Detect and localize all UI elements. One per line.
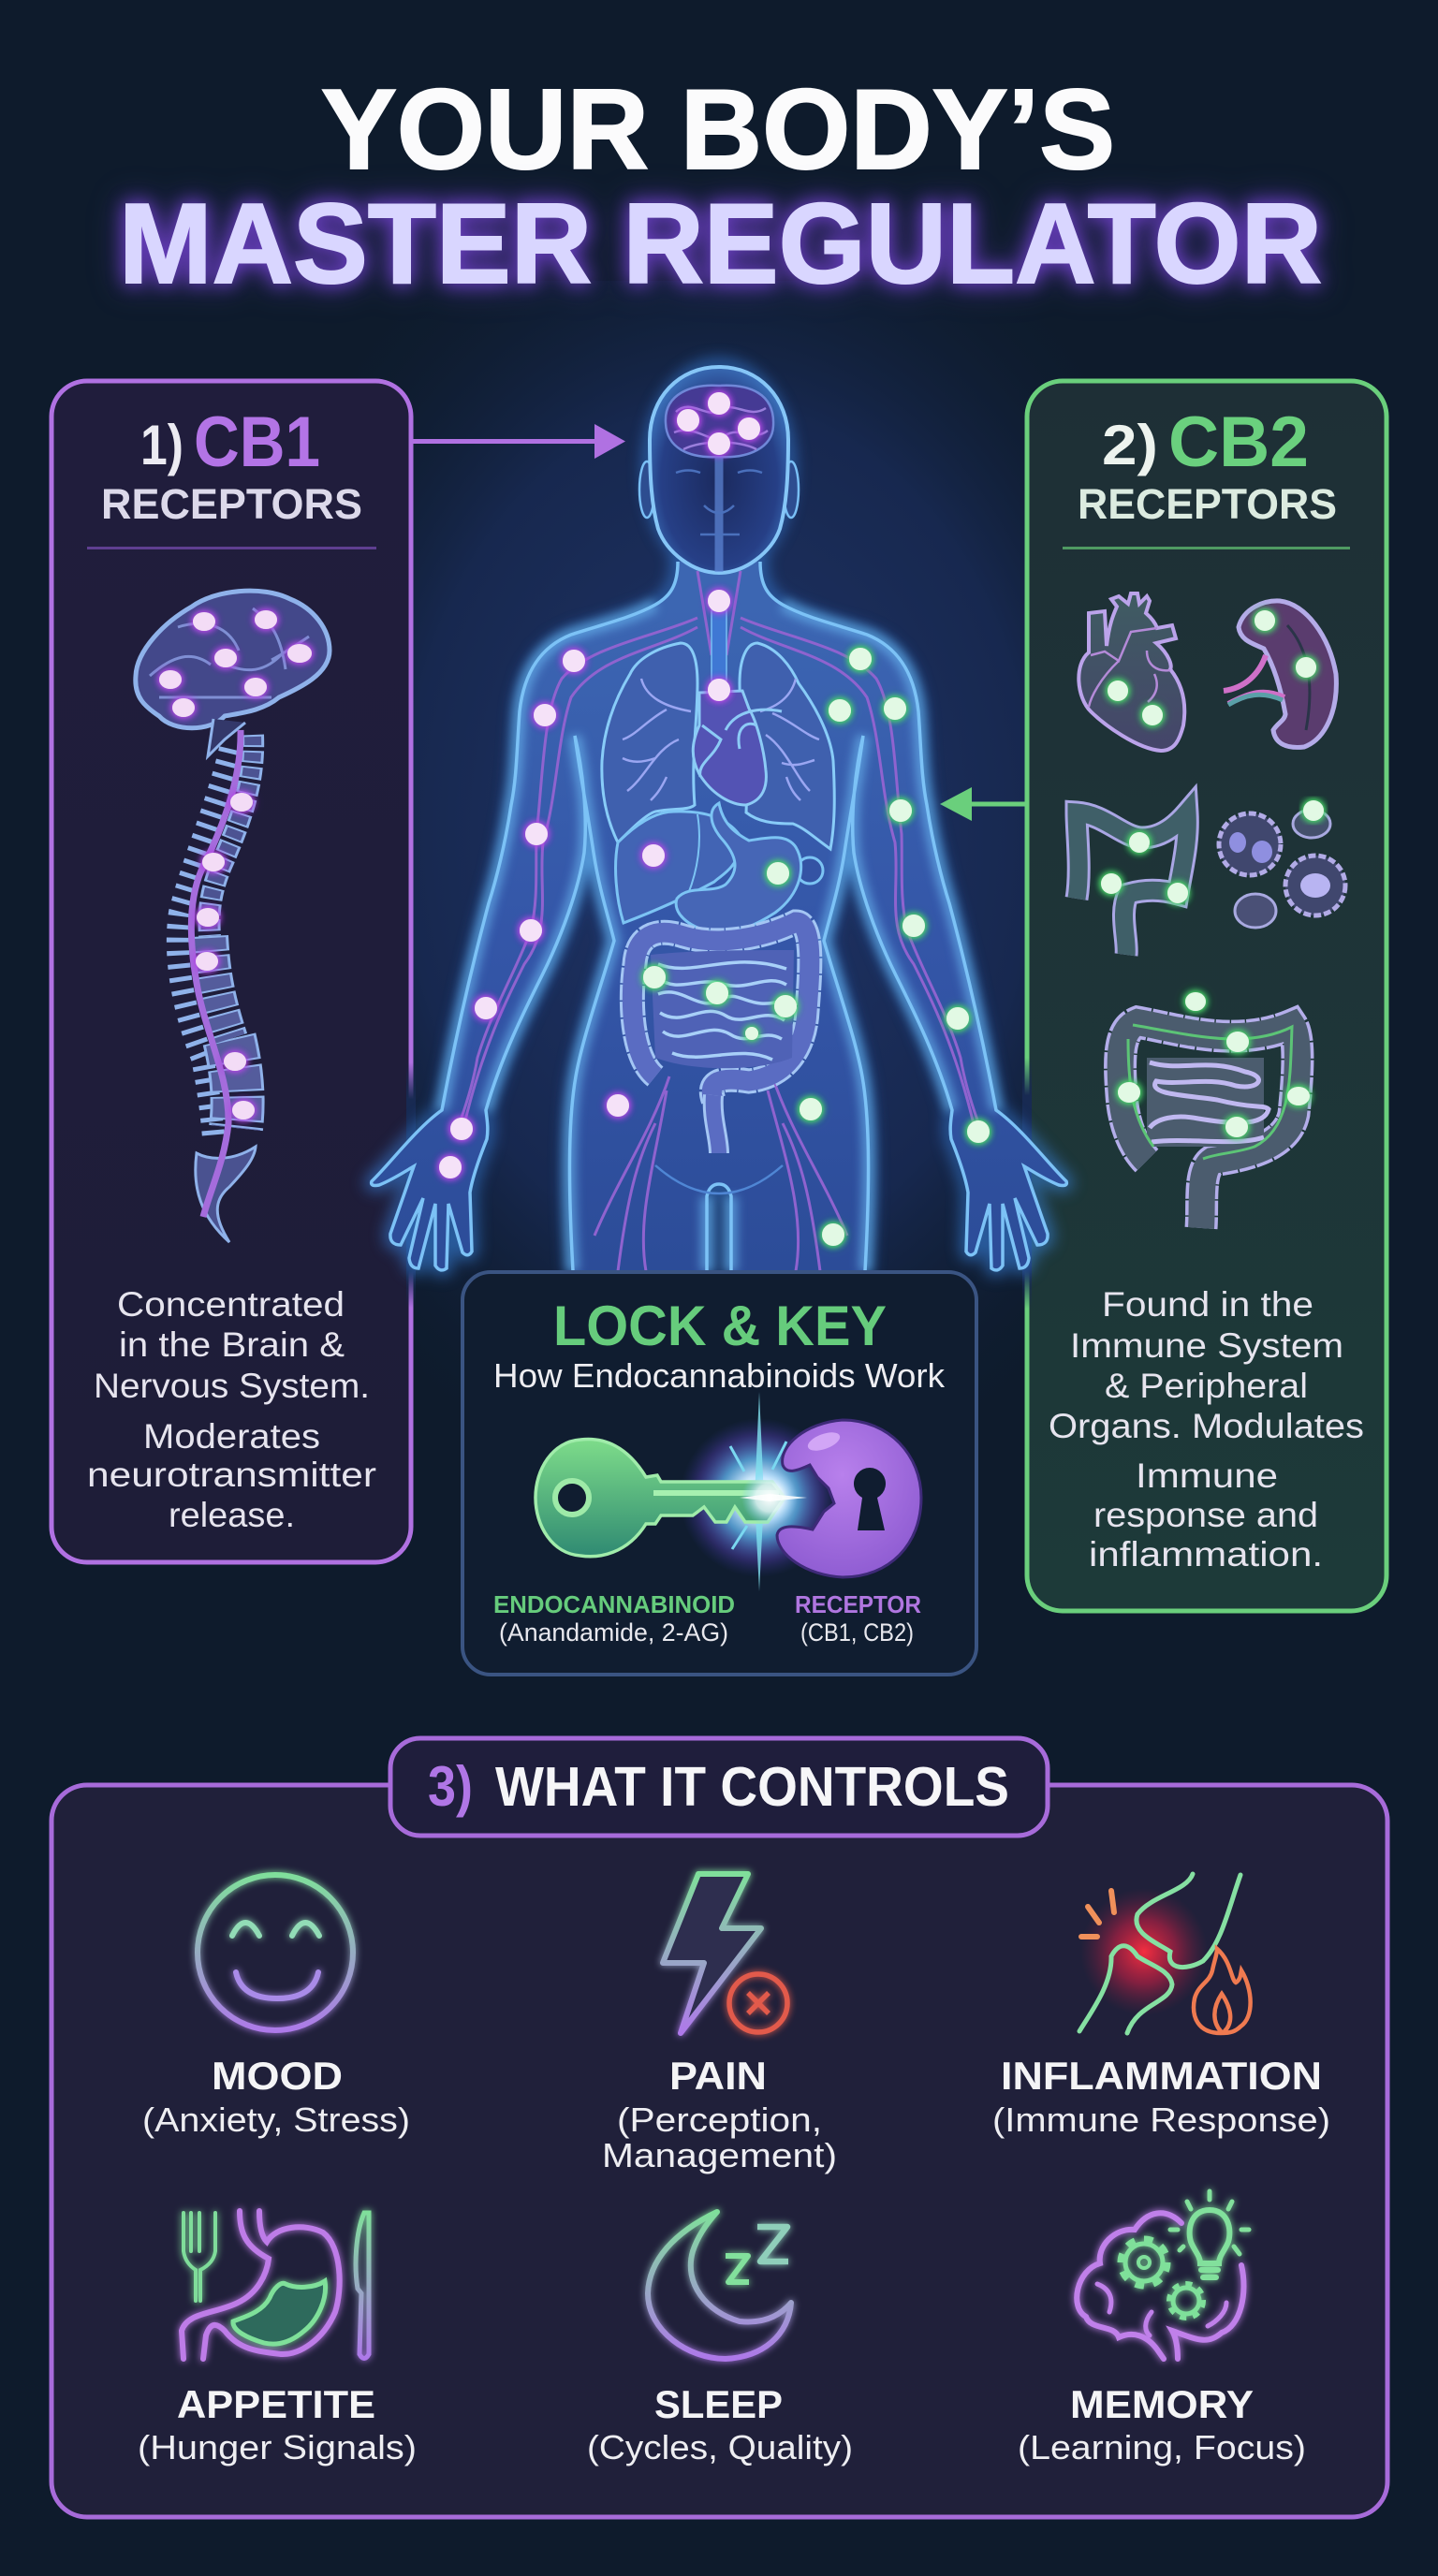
CB2 heading: RECEPTORS: [1078, 480, 1337, 528]
item: sleep: [587, 2212, 853, 2466]
item: inflammation: [992, 1874, 1330, 2139]
arrow: CB1 to brain: [413, 424, 625, 459]
title: [119, 66, 1322, 307]
CB2 description: Organs. Modulates: [1049, 1407, 1364, 1445]
CB2 description: Found in the: [1102, 1285, 1313, 1324]
icon: heart: [1078, 593, 1184, 751]
panel: CB1 receptors: [51, 381, 411, 1562]
icon: inflamed joint with flame: [1079, 1874, 1251, 2033]
panel edges fading behind hands: [406, 1058, 1032, 1309]
label: receptor: [795, 1590, 921, 1647]
CB2 description: response and: [1093, 1496, 1318, 1534]
item: pain: Management): [602, 2136, 837, 2174]
CB1 description: [87, 1285, 376, 1534]
icon: burst behind key: [680, 1392, 839, 1591]
body silhouette: [372, 365, 1066, 1271]
CB1 description: Concentrated: [117, 1285, 345, 1324]
section header pill: [390, 1738, 1048, 1836]
label: receptor: (CB1, CB2): [800, 1618, 914, 1647]
CB2 description: [1049, 1285, 1364, 1573]
head: [639, 367, 799, 573]
title: MASTER REGULATOR: [119, 180, 1322, 307]
CB1 description: Moderates: [143, 1417, 320, 1456]
item: appetite: APPETITE: [177, 2382, 375, 2426]
CB2 description: & Peripheral: [1105, 1367, 1308, 1405]
section header pill: WHAT IT CONTROLS: [495, 1756, 1009, 1818]
item: memory: MEMORY: [1070, 2382, 1254, 2426]
CB2 description: inflammation.: [1089, 1535, 1323, 1573]
CB2 heading: [1063, 402, 1350, 549]
CB2 heading: CB2: [1168, 402, 1309, 482]
receptor dots: CB1: [439, 392, 760, 1178]
panel: lock and key: [462, 1272, 976, 1675]
CB1 description: release.: [169, 1496, 295, 1534]
lungs: [602, 643, 834, 849]
item: sleep: (Cycles, Quality): [587, 2428, 853, 2466]
icon: intestines: [1118, 992, 1310, 1228]
nerves: [454, 571, 984, 1271]
CB1 heading: 1): [140, 414, 183, 476]
CB1 heading: RECEPTORS: [101, 480, 362, 528]
icon: key: [536, 1439, 785, 1557]
CB1 description: neurotransmitter: [87, 1456, 376, 1494]
item: inflammation: INFLAMMATION: [1001, 2054, 1322, 2098]
CB2 description: Immune System: [1070, 1326, 1343, 1365]
icon: contact flash: [740, 1470, 807, 1526]
CB1 heading: CB1: [194, 402, 320, 482]
item: appetite: [138, 2211, 417, 2466]
CB2 description: Immune: [1136, 1456, 1278, 1495]
label: receptor: RECEPTOR: [795, 1590, 921, 1618]
item: mood: MOOD: [212, 2054, 343, 2098]
icon: brain with gears and lightbulb: [1077, 2191, 1249, 2359]
icon: stomach with fork and knife: [182, 2211, 369, 2359]
panel: what it controls: [51, 1738, 1387, 2517]
receptor dots: CB2: [643, 648, 990, 1246]
icon: moon with z letters: [648, 2212, 791, 2359]
item: inflammation: (Immune Response): [992, 2100, 1330, 2139]
label: endocannabinoid: (Anandamide, 2-AG): [499, 1618, 728, 1647]
heart: [693, 691, 782, 805]
trachea: [712, 610, 726, 681]
item: pain: [602, 1874, 837, 2174]
icon: lock receptor: [777, 1420, 921, 1577]
section header pill: 3): [428, 1755, 473, 1818]
panel: CB2 receptors: [1027, 381, 1387, 1611]
title: YOUR BODY’S: [321, 66, 1115, 193]
item: memory: (Learning, Focus): [1018, 2428, 1306, 2466]
icon: immune cells: [1219, 800, 1345, 928]
icon: kidney: [1224, 601, 1336, 747]
icon: brain with receptor dots: [136, 591, 330, 756]
icon: smiley face: [198, 1875, 353, 2030]
item: pain: PAIN: [669, 2054, 767, 2098]
CB1 description: Nervous System.: [94, 1367, 370, 1405]
lock and key heading: LOCK & KEY: [553, 1295, 887, 1357]
label: endocannabinoid: ENDOCANNABINOID: [493, 1590, 735, 1618]
CB1 heading: [87, 402, 376, 549]
human body illustration: [372, 365, 1066, 1271]
item: mood: [142, 1875, 410, 2139]
subheading: How Endocannabinoids Work: [493, 1356, 946, 1395]
icon: spine: [178, 730, 256, 1242]
CB2 heading: 2): [1102, 414, 1158, 476]
CB1 description: in the Brain &: [119, 1325, 345, 1364]
icon: lightning bolt: [663, 1874, 761, 2033]
item: appetite: (Hunger Signals): [138, 2428, 417, 2466]
item: memory: [1018, 2191, 1306, 2466]
icon: blocked circle: [729, 1974, 787, 2032]
liver and stomach: [616, 803, 823, 932]
item: pain: (Perception,: [617, 2100, 822, 2139]
item: sleep: SLEEP: [654, 2382, 783, 2426]
icon: colon: [1077, 812, 1188, 955]
arrow: CB2 to body: [940, 787, 1026, 821]
label: endocannabinoid: [493, 1590, 735, 1647]
intestines: [632, 922, 810, 1153]
item: mood: (Anxiety, Stress): [142, 2100, 410, 2139]
